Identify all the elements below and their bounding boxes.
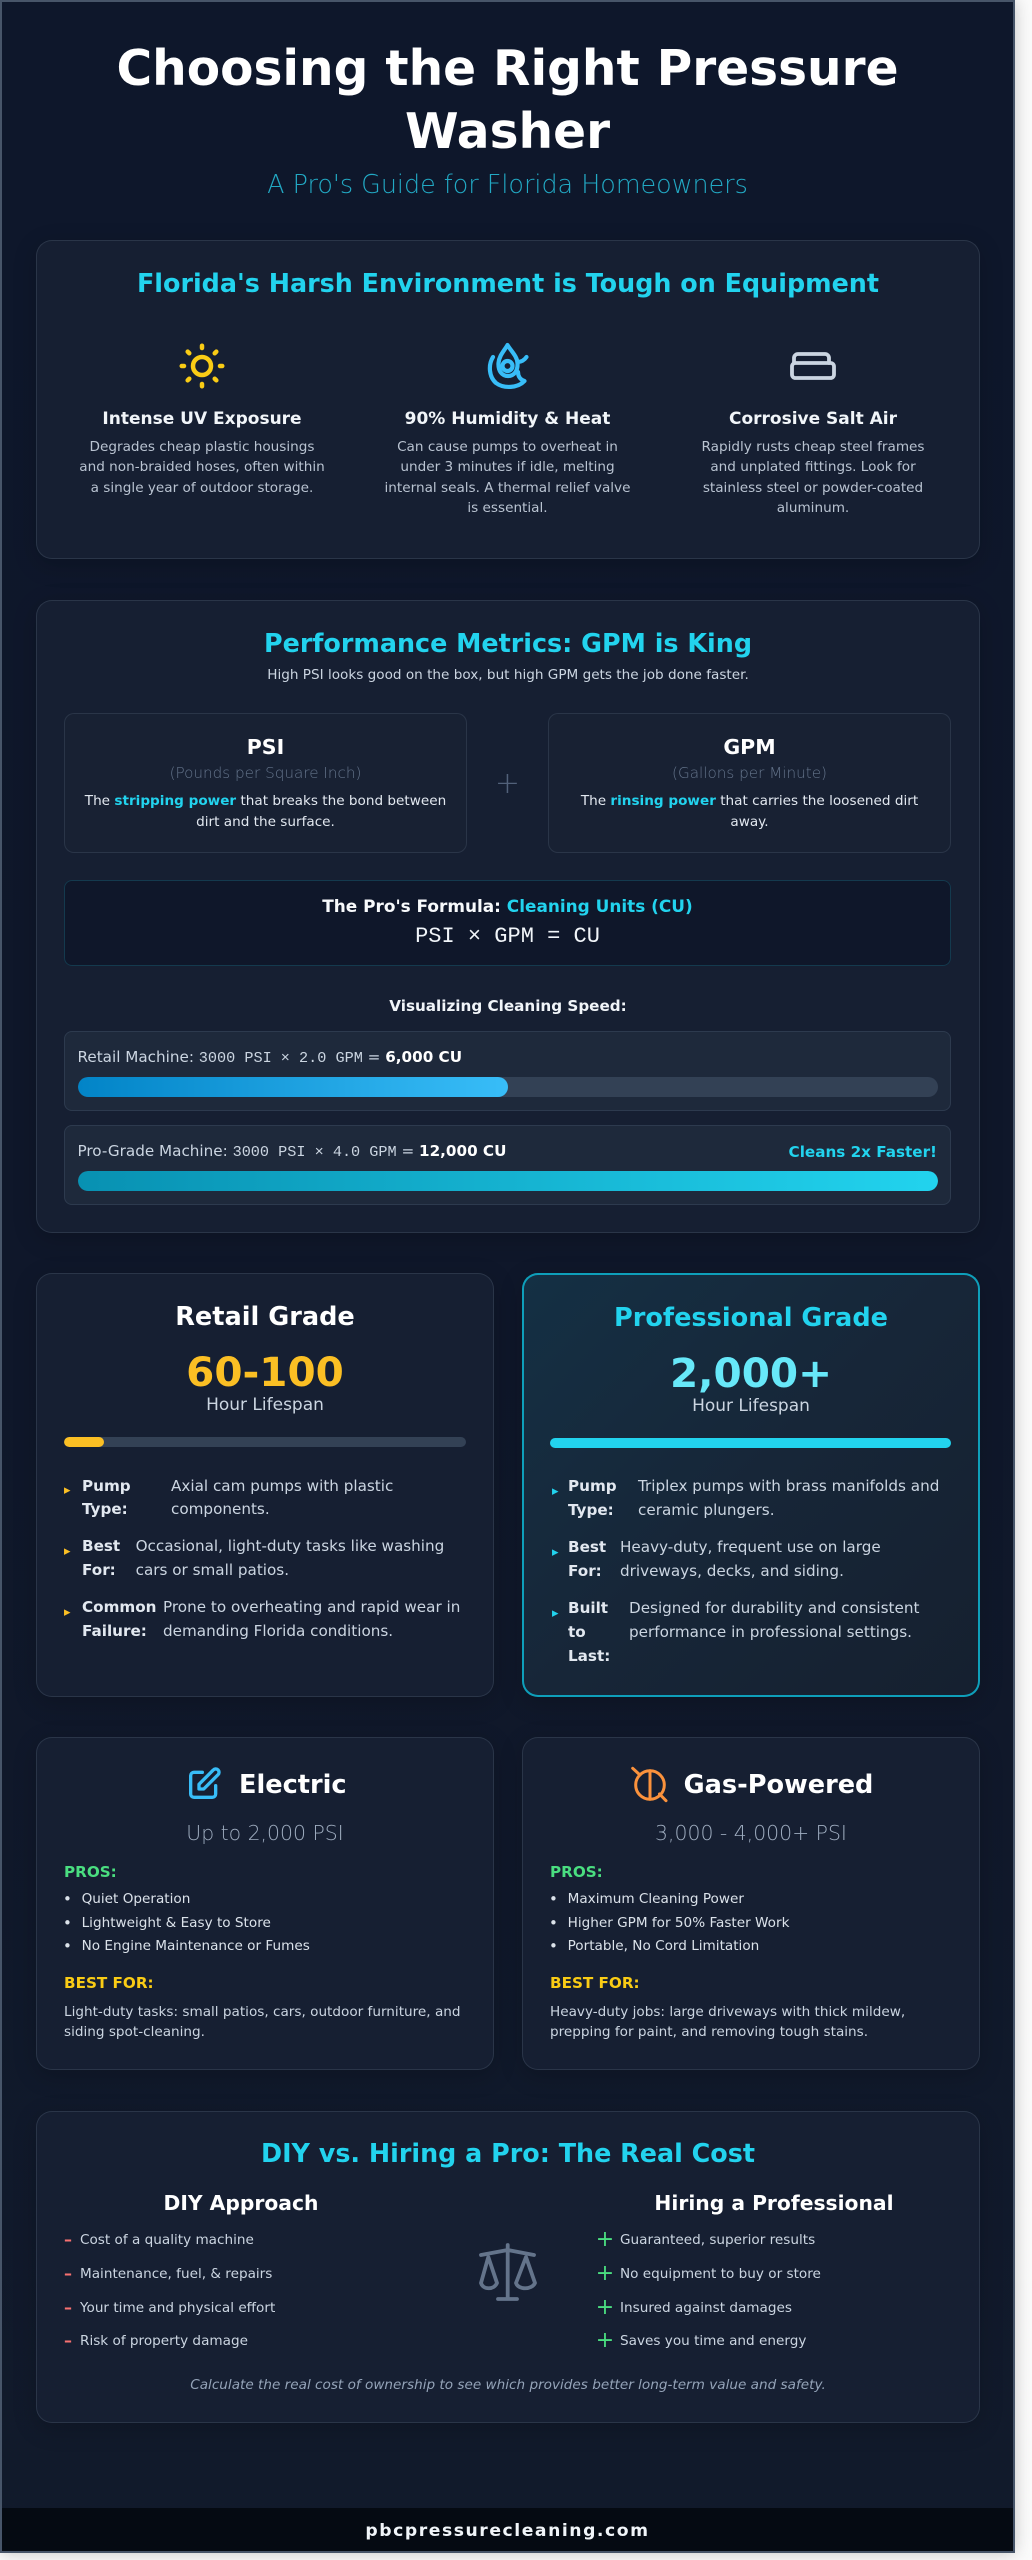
text: website: pbcpressurecleaning.com [365, 2521, 650, 2541]
text: pro item: Guaranteed, superior results [620, 2232, 815, 2248]
label: retail calc: Retail Machine: 3000 PSI × 2.0 GPM = 6,000 CU [78, 1048, 462, 1067]
icon: plus: + [495, 766, 520, 800]
icon: bullet: ▸ [552, 1545, 559, 1560]
text: best for [620, 1538, 881, 1580]
text: pump type [638, 1477, 939, 1519]
label: common failure: Failure: [82, 1622, 147, 1640]
text: gas best for: prepping for paint, and removing tough stains. [550, 2024, 868, 2040]
label: GPM meaning: (Gallons per Minute) [672, 764, 827, 782]
icon: minus: – [64, 2230, 72, 2249]
label: pro lifespan unit: Hour Lifespan [692, 1396, 810, 1416]
text: humidity description: is essential. [467, 500, 548, 516]
card: PSI [64, 713, 467, 853]
icon: bullet: ▸ [552, 1606, 559, 1621]
text: pump type: components. [171, 1500, 270, 1518]
text: pro item: No equipment to buy or store [620, 2266, 821, 2282]
icon: gas [631, 1766, 668, 1802]
label: built to last [568, 1599, 610, 1665]
text: pump type [171, 1476, 393, 1518]
label: GPM: GPM [723, 735, 776, 759]
text: built to last: performance in professional settings. [629, 1623, 912, 1641]
icon: plus: + [596, 2261, 614, 2286]
text: salt description: aluminum. [777, 500, 849, 516]
icon: salt air [790, 352, 836, 380]
icon: bullet: ▸ [64, 1605, 71, 1620]
text: humidity description [385, 439, 630, 516]
text: salt description: Rapidly rusts cheap steel frames [701, 439, 925, 455]
column: humidity: 90% Humidity & Heat [405, 408, 610, 428]
icon: list bullets [63, 1890, 72, 1955]
text: built to last [629, 1599, 920, 1641]
panel: electric [36, 1737, 494, 2070]
text: pump type: ceramic plungers. [638, 1501, 775, 1519]
label: pump type: Type: [568, 1501, 614, 1519]
panel: gas-powered [522, 1737, 980, 2070]
icon: plus: + [596, 2328, 614, 2353]
text: formula: PSI × GPM = CU [415, 924, 600, 949]
icon: list bullets [549, 1890, 558, 1955]
heading: visualizing speed: Visualizing Cleaning Speed: [389, 996, 627, 1014]
title [116, 41, 899, 160]
label: built to last: Last: [568, 1647, 610, 1665]
text: formula heading: The Pro's Formula: Cleaning Units (CU) [322, 896, 693, 916]
icon: list bullets: • [63, 1937, 72, 1955]
icon: flame humidity [488, 342, 529, 389]
text: pro item: Insured against damages [620, 2300, 792, 2316]
text: gas best for [550, 2004, 905, 2040]
text: best for: cars or small patios. [136, 1561, 289, 1579]
list: gas pros: Higher GPM for 50% Faster Work [568, 1915, 789, 1931]
label: built to last: to [568, 1623, 586, 1641]
heading: DIY vs pro: DIY vs. Hiring a Pro: The Real Cost [261, 2138, 755, 2168]
list: gas pros: Maximum Cleaning Power [568, 1891, 744, 1907]
panel: retail grade [36, 1273, 494, 1697]
icon: list bullets: • [63, 1914, 72, 1932]
text: pump type: Axial cam pumps with plastic [171, 1476, 393, 1494]
text: UV description [79, 439, 325, 496]
text: electric best for: siding spot-cleaning. [64, 2024, 205, 2040]
stat: pro lifespan: 2,000+ [670, 1349, 832, 1397]
icon: list bullets: • [549, 1914, 558, 1932]
heading: Florida environment: Florida's Harsh Environment is Tough on Equipment [137, 268, 879, 298]
label: best for: For: [568, 1562, 602, 1580]
text: common failure: Prone to overheating and rapid wear in [163, 1598, 460, 1616]
bar chart: pro machine [64, 1125, 951, 1205]
label: pump type [568, 1477, 617, 1519]
text: humidity description: internal seals. A thermal relief valve [385, 480, 630, 496]
label: best for [82, 1537, 120, 1579]
text: GPM description: The rinsing power that carries the loosened dirt [581, 793, 918, 809]
bar chart: retail machine [64, 1031, 951, 1111]
icon: plus: + [596, 2227, 614, 2252]
icon: minus: – [64, 2264, 72, 2283]
footer [2, 2508, 1013, 2551]
stat: retail lifespan: 60-100 [186, 1348, 344, 1396]
text: electric best for: Light-duty tasks: small patios, cars, outdoor furniture, and [64, 2004, 461, 2020]
text: DIY item: Maintenance, fuel, & repairs [80, 2266, 272, 2282]
title: Washer [405, 104, 610, 160]
list: electric pros: Lightweight & Easy to Store [82, 1915, 271, 1931]
label: PSI: PSI [247, 735, 284, 759]
label: common failure [82, 1598, 156, 1640]
panel: performance metrics [36, 600, 980, 1233]
text: UV description: and non-braided hoses, often within [79, 459, 325, 475]
text: gas PSI: 3,000 - 4,000+ PSI [655, 1821, 847, 1845]
text: metrics intro: High PSI looks good on the box, but high GPM gets the job done faster. [267, 667, 749, 683]
label: pump type [82, 1476, 131, 1518]
text: best for [136, 1537, 444, 1579]
icon: list bullets: • [549, 1937, 558, 1955]
text: PSI description: The stripping power that breaks the bond between [85, 793, 446, 809]
title: Choosing the Right Pressure [116, 41, 899, 97]
text: PSI description: dirt and the surface. [196, 814, 335, 830]
text: salt description: stainless steel or powder-coated [703, 480, 923, 496]
icon: minus: – [64, 2331, 72, 2350]
panel: Florida environment [36, 240, 980, 559]
text: pump type: Triplex pumps with brass manifolds and [638, 1477, 939, 1495]
text: electric best for [64, 2004, 461, 2040]
label: best for: BEST FOR: [64, 1974, 154, 1992]
list: gas pros: Portable, No Cord Limitation [568, 1938, 759, 1954]
icon: plus: + [596, 2295, 614, 2320]
text: gas best for: Heavy-duty jobs: large driveways with thick mildew, [550, 2004, 905, 2020]
heading: professional grade: Professional Grade [614, 1302, 888, 1332]
panel: DIY vs pro [36, 2111, 980, 2423]
callout: cleans faster: Cleans 2x Faster! [789, 1142, 937, 1160]
label: built to last: Built [568, 1599, 608, 1617]
label: best for: For: [82, 1561, 116, 1579]
column: salt air: Corrosive Salt Air [729, 408, 897, 428]
list: electric pros: Quiet Operation [82, 1891, 190, 1907]
list: electric pros: No Engine Maintenance or Fumes [82, 1938, 310, 1954]
text: humidity description: Can cause pumps to overheat in [397, 439, 618, 455]
text: DIY item: Your time and physical effort [80, 2300, 275, 2316]
icon: sun [180, 344, 224, 388]
label: best for: Best [568, 1538, 606, 1556]
heading: electric: Electric [239, 1770, 347, 1800]
icon: bullet: ▸ [552, 1484, 559, 1499]
bar: retail lifespan [64, 1437, 466, 1447]
text: best for: Occasional, light-duty tasks like washing [136, 1537, 444, 1555]
panel: professional grade [522, 1273, 980, 1697]
text: UV description: Degrades cheap plastic housings [90, 439, 314, 455]
heading: performance metrics: Performance Metrics: GPM is King [264, 628, 752, 658]
text: best for: driveways, decks, and siding. [620, 1562, 844, 1580]
icon: list bullets: • [63, 1890, 72, 1908]
heading: retail grade: Retail Grade [175, 1302, 355, 1332]
heading: hiring: Hiring a Professional [654, 2190, 894, 2214]
label: pros: PROS: [550, 1863, 603, 1881]
callout: formula [64, 880, 951, 966]
text: UV description: a single year of outdoor storage. [91, 480, 313, 496]
bar: pro [78, 1170, 938, 1190]
label: pump type: Type: [82, 1500, 128, 1518]
label: best for [568, 1538, 606, 1580]
text: common failure: demanding Florida conditions. [163, 1622, 393, 1640]
bar: pro lifespan [550, 1438, 951, 1448]
text: DIY item: Cost of a quality machine [80, 2232, 254, 2248]
icon: scales [479, 2243, 537, 2301]
heading: DIY: DIY Approach [164, 2190, 318, 2214]
text: salt description: and unplated fittings. Look for [710, 459, 916, 475]
text: common failure [163, 1598, 460, 1640]
bar: retail [78, 1076, 938, 1096]
text: GPM description: away. [730, 814, 769, 830]
label: common failure: Common [82, 1598, 156, 1616]
label: pump type: Pump [82, 1476, 131, 1494]
text: note: Calculate the real cost of ownership to see which provides better long-term value and safety. [190, 2377, 826, 2393]
text: humidity description: under 3 minutes if idle, melting [400, 459, 615, 475]
label: retail lifespan unit: Hour Lifespan [206, 1395, 324, 1415]
label: best for: BEST FOR: [550, 1974, 640, 1992]
list: electric pros [82, 1891, 310, 1954]
text: DIY item: Risk of property damage [80, 2333, 248, 2349]
text: GPM description [580, 793, 918, 830]
icon: minus: – [64, 2298, 72, 2317]
text: pro item: Saves you time and energy [620, 2333, 806, 2349]
list: gas pros [568, 1891, 790, 1954]
icon: electric [189, 1767, 221, 1799]
text: built to last: Designed for durability and consistent [629, 1599, 919, 1617]
icon: bullet: ▸ [64, 1544, 71, 1559]
column: UV: Intense UV Exposure [102, 408, 302, 428]
label: pros: PROS: [64, 1863, 117, 1881]
text: PSI description [84, 793, 446, 830]
label: best for: Best [82, 1537, 120, 1555]
text: electric PSI: Up to 2,000 PSI [186, 1821, 344, 1845]
text: salt description [701, 439, 925, 516]
label: pro calc: Pro-Grade Machine: 3000 PSI × 4.0 GPM = 12,000 CU [78, 1142, 506, 1161]
subtitle: A Pro's Guide for Florida Homeowners [267, 169, 748, 199]
heading: gas: Gas-Powered [684, 1770, 873, 1800]
icon: list bullets: • [549, 1890, 558, 1908]
icon: bullet: ▸ [64, 1483, 71, 1498]
label: pump type: Pump [568, 1477, 617, 1495]
card: GPM [548, 713, 951, 853]
text: best for: Heavy-duty, frequent use on large [620, 1538, 881, 1556]
label: PSI meaning: (Pounds per Square Inch) [170, 764, 361, 782]
